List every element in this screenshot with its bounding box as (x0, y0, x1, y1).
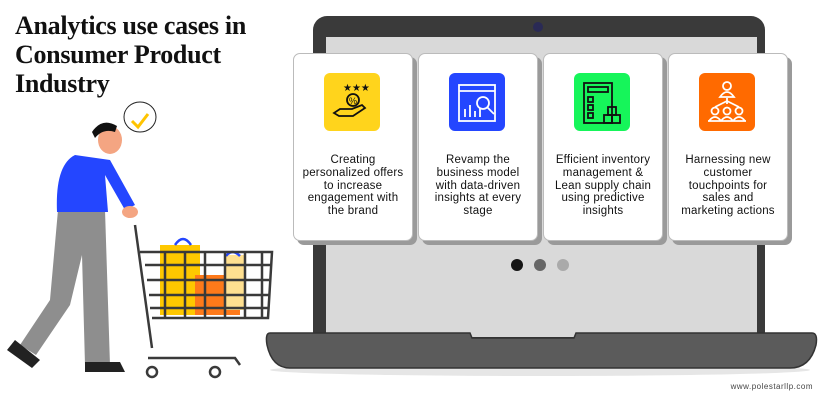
speech bubble with check (124, 102, 156, 132)
card 1: Creating personalized offers to increase engagement with the brand (303, 154, 403, 217)
card 2: Revamp the business model with data-driven insights at every stage (435, 154, 521, 217)
carousel dots (511, 259, 569, 271)
card 4: Harnessing new customer touchpoints for sales and marketing actions (681, 154, 775, 217)
title: Consumer Product (15, 40, 221, 69)
man (7, 123, 138, 372)
shopping cart (135, 225, 272, 377)
title: Industry (15, 69, 109, 98)
icon: hand with offer (324, 73, 380, 131)
website url: www.polestarllp.com (731, 382, 813, 391)
title (15, 11, 246, 98)
card 3 (543, 53, 663, 241)
laptop base (266, 333, 816, 376)
card 2 (418, 53, 538, 241)
icon: hand with offer: % (349, 96, 357, 106)
laptop lid (313, 16, 765, 346)
title: Analytics use cases in (15, 11, 246, 40)
icon: inventory checklist (574, 73, 630, 131)
card 3: Efficient inventory management & Lean supply chain using predictive insights (555, 154, 651, 217)
icon: customer network (699, 73, 755, 131)
card 1 (293, 53, 413, 241)
icon: hand with offer: ★★★ (343, 83, 370, 94)
illustration: man with shopping cart (7, 102, 274, 378)
card 4 (668, 53, 788, 241)
icon: analytics dashboard (449, 73, 505, 131)
